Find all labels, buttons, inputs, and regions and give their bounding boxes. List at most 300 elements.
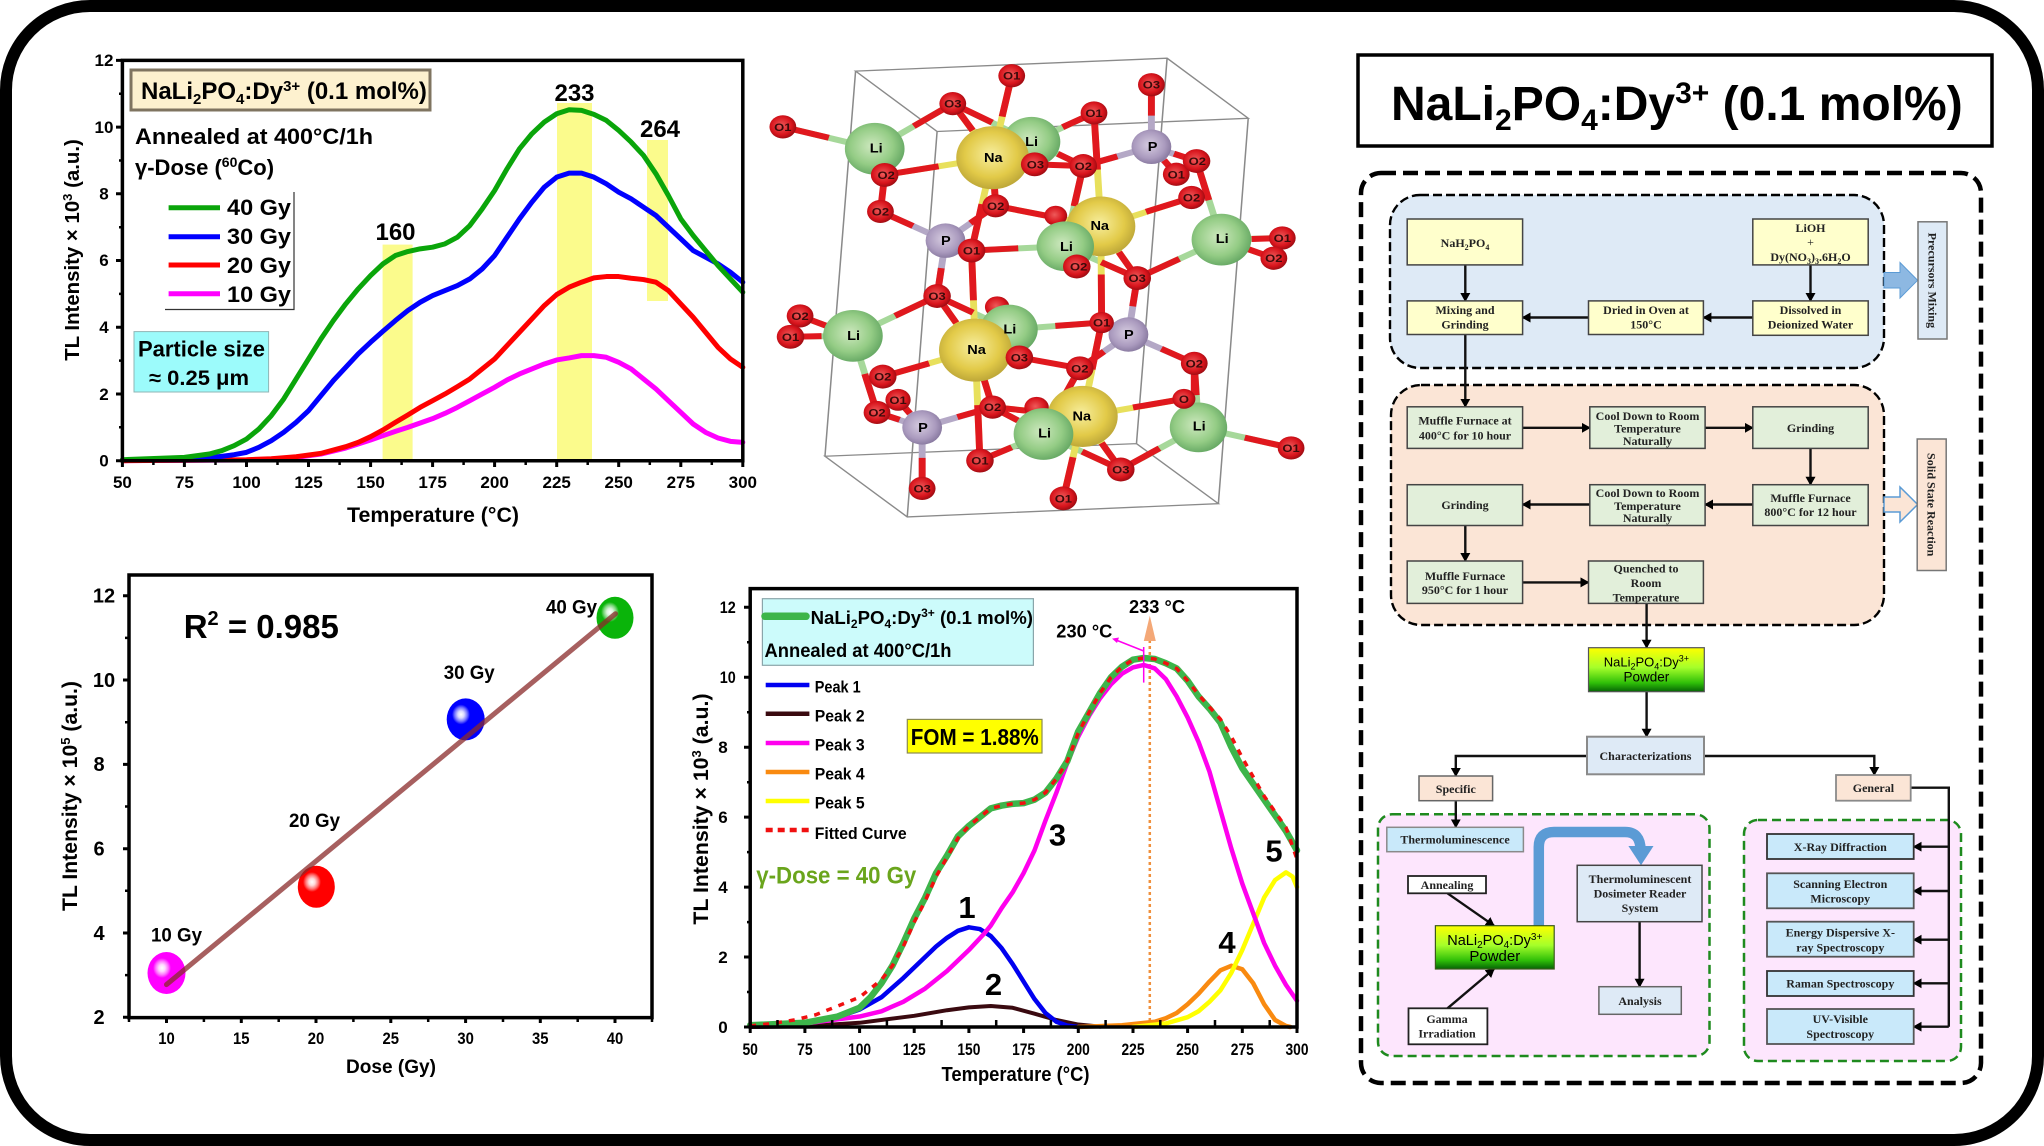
curve: fitted dashed (750, 658, 1297, 1026)
title box: NaLi (1391, 78, 1495, 131)
specimen powder box: 2 (1477, 940, 1483, 951)
specific box (1419, 776, 1493, 801)
atom labels: Li (1193, 420, 1206, 433)
peak labels: 233 (554, 80, 595, 107)
step boxes: precursors (1407, 219, 1868, 335)
x-axis tick labels: 175 (1012, 1040, 1035, 1059)
temperature annotations: 230 °C (1056, 622, 1112, 642)
general techniques: Raman Spectroscopy (1786, 976, 1894, 990)
temperature annotations (1056, 597, 1185, 642)
connectors (1448, 265, 1949, 1027)
x-axis tick labels: 200 (480, 473, 509, 492)
y-axis tick labels: 12 (93, 586, 115, 608)
x-axis tick labels: 50 (113, 473, 132, 492)
atom labels: Na (967, 343, 986, 357)
sample label box: :Dy (244, 78, 284, 105)
curve: peak 1 (750, 927, 1078, 1027)
y-axis tick labels: 6 (99, 251, 109, 270)
legend: 40 Gy (227, 195, 292, 220)
sample label box: 2 (193, 91, 201, 108)
specific box: Specific (1436, 782, 1476, 796)
sample legend box: 3+ (921, 606, 935, 620)
side label: solid state reaction (1917, 439, 1946, 570)
curve: peak 4 (1078, 966, 1290, 1027)
x-axis tick labels: 175 (418, 473, 447, 492)
peak labels: 160 (375, 219, 416, 246)
step boxes: solid state reaction: Muffle Furnace at (1418, 414, 1512, 428)
oxygen labels: O2 (1186, 357, 1203, 370)
title box: 2 (1495, 104, 1512, 137)
group: specific characterization (1378, 814, 1710, 1056)
oxygen labels: O3 (1011, 351, 1028, 364)
y-axis tick labels (95, 51, 113, 470)
step boxes: precursors: 2 (1465, 243, 1469, 252)
atom labels: Li (1025, 135, 1038, 149)
y-axis title: (a.u.) (689, 693, 713, 750)
general techniques: UV-Visible (1813, 1012, 1869, 1026)
peak labels (375, 80, 681, 246)
oxygen labels: O2 (1183, 191, 1201, 204)
step boxes: solid state reaction: Grinding (1787, 421, 1834, 435)
atom labels: P (941, 234, 951, 248)
y-axis title: (a.u.) (59, 681, 82, 738)
step boxes: precursors: Dried in Oven at (1603, 303, 1689, 317)
y-axis tick labels: 8 (93, 754, 105, 776)
annealing box (1408, 876, 1486, 893)
atom labels: Na (984, 151, 1003, 165)
y-axis tick labels (718, 598, 736, 1037)
oxygen labels: O2 (878, 169, 895, 182)
peak numbers: 4 (1218, 925, 1236, 960)
step boxes: precursors: Dy(NO (1770, 250, 1807, 264)
particle size callout: Particle size (138, 336, 265, 362)
x-axis tick labels: 250 (605, 473, 633, 492)
dose source note: 60 (222, 154, 238, 170)
legend: 20 Gy (227, 253, 292, 278)
front lithium atoms (1014, 221, 1094, 460)
step boxes: precursors: NaH (1441, 236, 1465, 250)
legend: 30 Gy (227, 224, 292, 249)
title box (1358, 55, 1992, 146)
side label: precursors mixing: Precursors Mixing (1926, 233, 1940, 328)
specimen powder box: 3+ (1531, 932, 1542, 943)
dose source note: Co) (237, 155, 274, 180)
oxygen labels (774, 70, 1300, 505)
phosphorus atoms (902, 130, 1171, 445)
x-axis tick labels: 125 (903, 1040, 926, 1059)
step boxes: solid state reaction: Temperature (1614, 499, 1682, 513)
atom labels: Na (1090, 219, 1109, 233)
oxygen labels: O1 (1055, 492, 1072, 505)
oxygen labels: O2 (1189, 155, 1206, 168)
sample legend box: NaLi (811, 607, 851, 628)
peak numbers (958, 818, 1283, 1002)
arrow: precursors (1884, 262, 1918, 298)
step boxes: precursors: 2 (1837, 257, 1841, 266)
specimen powder box: Powder (1469, 948, 1520, 965)
step boxes: solid state reaction: Naturally (1623, 434, 1672, 448)
atom labels: P (1124, 328, 1134, 342)
outer dashed border (1361, 173, 1981, 1083)
peak legend: Peak 3 (815, 736, 865, 754)
x-axis tick labels: 300 (729, 473, 757, 492)
peak labels: 264 (640, 116, 681, 143)
x-axis tick labels: 10 (158, 1029, 175, 1048)
dose labels: 20 Gy (289, 811, 340, 832)
oxygen labels: O2 (984, 401, 1002, 414)
oxygen labels: O2 (1070, 260, 1088, 273)
R-squared value: 2 (208, 608, 219, 630)
atom labels: Li (1216, 232, 1229, 246)
side label: solid state reaction: Solid State Reaction (1924, 453, 1938, 557)
curve: peak 5 (1133, 872, 1297, 1027)
step boxes: precursors: Mixing and (1435, 303, 1495, 317)
characterizations box (1587, 737, 1704, 774)
panel: crystal structure (769, 58, 1304, 517)
specimen powder box (1435, 926, 1554, 969)
thermoluminescence box (1387, 827, 1523, 852)
panel: TL glow curves by dose (60, 51, 757, 527)
oxygen labels: O2 (872, 205, 889, 218)
x-axis tick labels: 250 (1176, 1040, 1199, 1059)
y-axis tick labels: 0 (718, 1018, 728, 1037)
general techniques: ray Spectroscopy (1796, 940, 1884, 954)
x-axis title: Temperature (°C) (347, 504, 519, 527)
x-axis tick labels (742, 1040, 1308, 1059)
atom labels: Li (847, 329, 860, 343)
dose labels (151, 598, 597, 946)
step boxes: precursors: ) (1811, 250, 1815, 264)
y-axis title: 3 (60, 194, 75, 201)
atom labels: Li (870, 142, 883, 156)
annealing note: Annealed at 400°C/1h (135, 124, 373, 149)
oxygen labels: O2 (874, 370, 892, 383)
analysis box: Analysis (1618, 994, 1662, 1008)
x-axis tick labels (113, 473, 757, 492)
step boxes: precursors: Deionized Water (1768, 318, 1854, 332)
step boxes: solid state reaction: 950°C for 1 hour (1422, 583, 1509, 597)
y-axis tick labels: 0 (99, 452, 109, 470)
peak legend: Peak 4 (815, 766, 865, 784)
figure-of-merit callout: FOM = 1.88% (911, 724, 1039, 750)
y-axis title: TL Intensity × 10 (62, 201, 84, 361)
gamma irradiation box (1408, 1008, 1487, 1044)
oxygen labels: O3 (1143, 79, 1160, 91)
curve: 40 Gy (122, 110, 743, 460)
curve: peak 3 (750, 665, 1297, 1026)
peak numbers: 2 (985, 967, 1002, 1002)
x-axis tick labels: 30 (457, 1029, 474, 1048)
x-axis tick labels: 100 (232, 473, 261, 492)
atom labels: Li (1060, 240, 1073, 254)
step boxes: solid state reaction: Muffle Furnace (1770, 491, 1851, 505)
axes frame (744, 589, 1297, 1033)
sample legend box (762, 599, 1033, 665)
step boxes: solid state reaction: Quenched to (1613, 562, 1679, 576)
powder box: 3+ (1679, 654, 1689, 664)
oxygen labels: O3 (1027, 158, 1044, 171)
back oxygen atoms (985, 163, 1190, 418)
x-axis tick labels: 275 (1231, 1040, 1254, 1059)
dose label: γ-Dose = 40 Gy (756, 863, 917, 890)
y-axis tick labels: 6 (718, 808, 728, 827)
y-axis tick labels (93, 586, 115, 1029)
y-axis tick labels: 6 (93, 838, 105, 860)
y-axis tick labels: 2 (99, 385, 109, 404)
y-axis tick labels: 10 (95, 118, 113, 137)
dose labels: 40 Gy (546, 598, 597, 618)
x-axis tick labels (158, 1029, 623, 1048)
legend (165, 192, 294, 310)
data point: 20 Gy (298, 866, 335, 908)
step boxes: solid state reaction: Temperature (1613, 590, 1680, 604)
x-axis tick labels: 275 (667, 473, 695, 492)
x-axis title: Temperature (°C) (942, 1064, 1090, 1086)
atom labels: Na (1072, 410, 1091, 424)
step boxes: precursors: Dissolved in (1780, 303, 1842, 317)
peak legend (766, 678, 907, 843)
x-axis tick labels: 300 (1286, 1040, 1308, 1059)
y-axis tick labels: 4 (93, 923, 105, 945)
step boxes: precursors: .6H (1819, 250, 1838, 264)
gamma irradiation box: Irradiation (1418, 1026, 1476, 1040)
characterizations box: Characterizations (1600, 749, 1692, 763)
general box: General (1853, 781, 1895, 795)
title box: (0.1 mol%) (1709, 78, 1963, 131)
sample label box: 4 (236, 91, 245, 108)
y-axis tick labels: 10 (720, 668, 736, 687)
oxygen labels: O1 (782, 331, 799, 344)
data point: 30 Gy (447, 698, 485, 740)
x-axis tick labels: 125 (294, 473, 323, 492)
powder box (1588, 648, 1704, 692)
peak numbers: 5 (1265, 833, 1283, 868)
x-axis tick labels: 20 (308, 1029, 324, 1048)
oxygen labels: O (1179, 393, 1189, 406)
gamma irradiation box: Gamma (1426, 1012, 1468, 1026)
general box (1836, 775, 1911, 801)
oxygen labels: O2 (1265, 252, 1283, 265)
dose source note: γ-Dose ( (135, 155, 222, 180)
oxygen labels: O3 (944, 97, 962, 110)
step boxes: precursors: PO (1469, 236, 1485, 250)
TLD reader box (1577, 865, 1702, 922)
step boxes: precursors: LiOH (1795, 221, 1826, 235)
curve: 20 Gy (122, 277, 743, 461)
oxygen labels: O3 (1112, 463, 1130, 476)
annealing box: Annealing (1421, 878, 1473, 892)
sodium atoms (939, 126, 1135, 447)
sample legend box: 2 (851, 617, 858, 631)
x-axis tick labels: 100 (848, 1040, 871, 1059)
peak numbers: 1 (958, 890, 976, 925)
x-axis tick labels: 75 (175, 473, 194, 492)
TLD reader box: System (1622, 901, 1658, 915)
x-axis tick labels: 225 (543, 473, 571, 492)
sample legend box: PO (858, 607, 884, 628)
y-axis title: 5 (58, 738, 73, 745)
y-axis title: (a.u.) (62, 139, 84, 194)
arrow: solid state (1884, 487, 1918, 522)
step boxes: precursors: 3 (1815, 257, 1819, 266)
atom labels: Li (1038, 426, 1051, 440)
sample label box: 3+ (283, 78, 300, 95)
curved blue arrow (1539, 832, 1654, 926)
axes frame (123, 575, 652, 1023)
peak legend: Peak 1 (815, 678, 861, 696)
y-axis tick labels: 8 (718, 738, 728, 757)
dose labels: 30 Gy (444, 663, 495, 684)
powder box: 2 (1630, 662, 1635, 672)
step boxes: solid state reaction: Room (1631, 576, 1661, 590)
dose labels: 10 Gy (151, 926, 202, 946)
y-axis tick labels: 4 (99, 318, 109, 337)
magenta marker at 230 (1112, 638, 1144, 683)
curve: 10 Gy (122, 356, 743, 461)
curve: experimental glow curve (750, 658, 1297, 1025)
step boxes: solid state reaction: 800°C for 12 hour (1764, 505, 1857, 519)
oxygen labels: O2 (868, 406, 886, 419)
step boxes: precursors: + (1807, 235, 1814, 249)
x-axis tick labels: 75 (797, 1040, 813, 1059)
x-axis tick labels: 25 (383, 1029, 399, 1048)
analysis box (1599, 987, 1681, 1014)
general techniques: Scanning Electron (1793, 877, 1888, 891)
side label: precursors mixing (1918, 222, 1947, 339)
orange dotted marker at 233 (1144, 616, 1156, 1027)
step boxes: precursors: 150°C (1630, 318, 1662, 332)
oxygen labels: O1 (1003, 70, 1021, 83)
atom labels: P (1148, 140, 1157, 154)
step boxes: solid state reaction (1407, 407, 1868, 604)
x-axis tick labels: 15 (233, 1029, 250, 1048)
legend: 10 Gy (227, 282, 292, 307)
sample legend box: :Dy (891, 607, 922, 628)
oxygen labels: O2 (791, 310, 809, 323)
general techniques: Energy Dispersive X- (1786, 926, 1895, 940)
thermoluminescence box: Thermoluminescence (1400, 832, 1510, 846)
oxygen labels: O1 (1085, 107, 1103, 120)
oxygen labels: O1 (1274, 232, 1291, 245)
step boxes: solid state reaction: Cool Down to Room (1596, 486, 1699, 500)
step boxes: precursors: 4 (1485, 243, 1489, 252)
oxygen labels: O2 (987, 200, 1005, 213)
general techniques (1767, 834, 1914, 1044)
oxygen labels: O1 (889, 394, 907, 407)
x-axis tick labels: 50 (742, 1040, 758, 1059)
oxygen labels: O1 (774, 121, 792, 134)
sample label box: PO (201, 78, 236, 105)
powder box: :Dy (1659, 654, 1679, 670)
bonds (783, 76, 1291, 498)
panel: synthesis flowchart (1361, 173, 1981, 1083)
y-axis tick labels: 10 (93, 670, 115, 692)
peak legend: Peak 5 (815, 795, 865, 813)
step boxes: solid state reaction: Muffle Furnace (1425, 569, 1506, 583)
sample label box: (0.1 mol%) (300, 78, 427, 105)
y-axis title: TL Intensity × 10 (689, 757, 713, 925)
oxygen labels: O1 (1282, 442, 1300, 455)
specimen powder box: 4 (1504, 940, 1510, 951)
step boxes: precursors: 3 (1807, 257, 1811, 266)
step boxes: precursors: O (1841, 250, 1851, 264)
lithium atoms (823, 117, 1251, 452)
oxygen labels: O2 (1075, 160, 1092, 173)
powder box: 4 (1654, 662, 1659, 672)
sample legend box: (0.1 mol%) (935, 607, 1033, 628)
x-axis title: Dose (Gy) (346, 1057, 436, 1078)
atom labels (847, 135, 1229, 440)
step boxes: solid state reaction: Cool Down to Room (1596, 409, 1699, 423)
highlight bands at 160, 233 and 264 (383, 103, 668, 461)
TLD reader box: Dosimeter Reader (1594, 886, 1687, 900)
sample legend box: Annealed at 400°C/1h (764, 641, 952, 662)
powder box: NaLi (1604, 654, 1630, 670)
powder box: PO (1635, 654, 1654, 670)
temperature annotations: 233 °C (1129, 597, 1185, 617)
x-axis tick labels: 35 (532, 1029, 549, 1048)
step boxes: solid state reaction: 400°C for 10 hour (1419, 428, 1512, 442)
y-axis tick labels: 4 (718, 878, 728, 897)
x-axis tick labels: 150 (957, 1040, 980, 1059)
oxygen atoms (769, 64, 1304, 510)
data point: 40 Gy (596, 597, 634, 639)
general techniques: X-Ray Diffraction (1794, 840, 1887, 854)
unit cell wireframe back (825, 58, 1248, 517)
specimen powder box: NaLi (1447, 933, 1477, 949)
title box: 4 (1581, 104, 1598, 137)
oxygen labels: O1 (1093, 316, 1111, 329)
R-squared value: = 0.985 (219, 608, 339, 645)
y-axis tick labels: 8 (99, 184, 109, 204)
x-axis tick labels: 40 (607, 1029, 623, 1048)
TLD reader box: Thermoluminescent (1589, 872, 1691, 886)
y-axis tick labels: 2 (93, 1007, 105, 1029)
oxygen labels: O3 (1129, 272, 1146, 285)
oxygen labels: O3 (928, 290, 946, 303)
atom labels: P (918, 421, 928, 435)
atom labels: Li (1003, 322, 1016, 336)
y-axis tick labels: 12 (720, 598, 736, 617)
step boxes: solid state reaction: Temperature (1614, 422, 1682, 436)
title box: PO (1512, 78, 1581, 131)
curve: 30 Gy (122, 173, 743, 460)
step boxes: solid state reaction: Naturally (1623, 511, 1672, 525)
oxygen labels: O1 (971, 454, 989, 467)
y-axis title: 3 (689, 750, 704, 757)
y-axis tick labels: 2 (718, 948, 728, 967)
step boxes: solid state reaction: Grinding (1441, 498, 1489, 512)
y-axis title: TL Intensity × 10 (59, 745, 82, 911)
panel: peak deconvolution chart (689, 589, 1308, 1086)
sample legend box: 4 (884, 617, 891, 631)
sample label box (131, 70, 430, 110)
sample label box: NaLi (141, 78, 193, 105)
axes frame (116, 60, 743, 467)
x-axis tick labels: 150 (356, 473, 385, 492)
group: solid state reaction (1391, 385, 1884, 625)
group: general characterization (1744, 820, 1961, 1061)
general techniques: Microscopy (1810, 892, 1870, 906)
R-squared value: R (184, 608, 208, 645)
oxygen labels: O2 (1071, 362, 1089, 375)
data point: 10 Gy (148, 952, 186, 994)
powder box: Powder (1624, 670, 1670, 684)
peak legend: Peak 2 (815, 708, 865, 726)
title box: :Dy (1598, 78, 1675, 131)
particle size callout: ≈ 0.25 μm (149, 367, 249, 390)
step boxes: precursors: Grinding (1441, 318, 1489, 332)
